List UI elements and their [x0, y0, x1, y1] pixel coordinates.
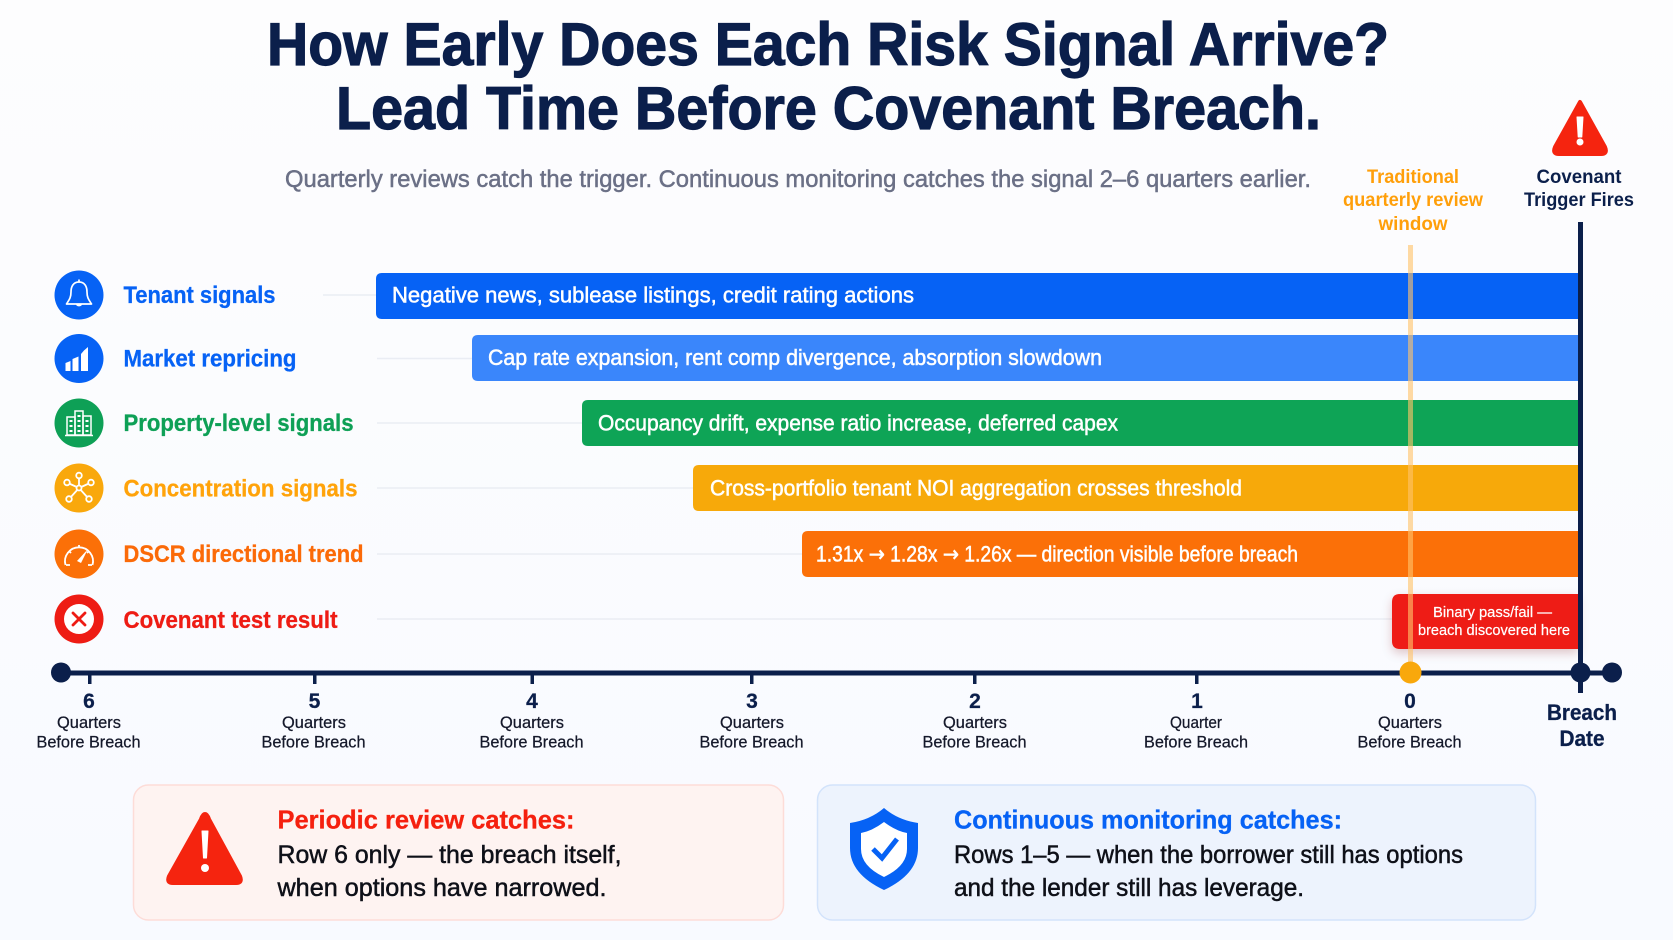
panel: continuous monitoring: Rows 1–5 — when the borrower still has options	[954, 841, 1463, 869]
axis labels: 4	[526, 690, 538, 713]
label: traditional review window: Traditional	[1367, 167, 1459, 188]
axis labels: 0	[1404, 690, 1416, 713]
axis labels: Quarters	[720, 714, 784, 732]
row 5: DSCR directional trend: DSCR directional trend	[124, 541, 364, 568]
row 4: concentration signals: Concentration signals	[124, 476, 358, 502]
icon: bar chart	[54, 334, 104, 383]
row 4: concentration signals	[54, 464, 1578, 512]
label: covenant trigger fires	[1524, 167, 1634, 211]
axis labels: Quarters	[500, 714, 564, 732]
panel: continuous monitoring	[818, 785, 1536, 920]
row 1: tenant signals: Negative news, sublease listings, credit rating actions	[392, 282, 914, 308]
axis labels: Before Breach	[1144, 734, 1248, 752]
row 3: property-level signals	[54, 398, 1578, 448]
timeline axis	[51, 222, 1622, 693]
axis labels: 5	[309, 690, 321, 713]
axis labels: Before Breach	[922, 734, 1026, 752]
axis labels: Quarter	[1170, 714, 1222, 732]
label: breach date: Breach	[1547, 700, 1617, 725]
axis labels: Before Breach	[262, 734, 366, 752]
title: How Early Does Each Risk Signal Arrive?	[267, 11, 1389, 78]
axis labels: 1	[1191, 690, 1203, 713]
title: Lead Time Before Covenant Breach.	[336, 75, 1321, 142]
icon: buildings	[54, 398, 104, 448]
label: breach date	[1547, 700, 1617, 751]
panel: periodic review: when options have narrowed.	[276, 874, 606, 902]
axis labels	[36, 690, 1462, 752]
panel: periodic review	[134, 785, 784, 920]
panel: continuous monitoring: and the lender still has leverage.	[954, 874, 1304, 902]
axis labels: Before Breach	[700, 734, 804, 752]
axis labels: 6	[83, 690, 95, 713]
axis labels: Quarters	[943, 714, 1007, 732]
row 3: property-level signals: Occupancy drift, expense ratio increase, deferred capex	[598, 410, 1118, 436]
row 6: covenant test result: breach discovered here	[1418, 622, 1570, 639]
icon: bell	[54, 270, 104, 320]
label: breach date: Date	[1560, 726, 1604, 751]
row 4: concentration signals: Cross-portfolio tenant NOI aggregation crosses threshold	[710, 476, 1242, 500]
icon: covenant warning triangle	[1554, 102, 1606, 154]
icon: network	[54, 464, 104, 512]
row 2: market repricing: Cap rate expansion, rent comp divergence, absorption slowdown	[488, 345, 1102, 370]
axis labels: Quarters	[57, 714, 121, 732]
row 6: covenant test result	[54, 594, 1578, 649]
label: traditional review window	[1343, 167, 1483, 235]
panel: periodic review: Row 6 only — the breach itself,	[278, 841, 622, 869]
row 2: market repricing: Market repricing	[124, 346, 296, 372]
axis labels: Before Breach	[1358, 734, 1462, 752]
label: traditional review window: window	[1378, 214, 1448, 235]
row 1: tenant signals	[54, 270, 1578, 320]
icon: shield	[850, 808, 918, 890]
panel: periodic review: Periodic review catches:	[278, 804, 574, 834]
connector lines	[323, 295, 1392, 619]
label: covenant trigger fires: Trigger Fires	[1524, 190, 1634, 211]
icon: red x	[54, 594, 104, 644]
axis labels: Quarters	[1378, 714, 1442, 732]
label: traditional review window: quarterly review	[1343, 190, 1483, 211]
row 5: DSCR directional trend: 1.31x → 1.28x → 1.26x — direction visible before breach	[816, 542, 1298, 568]
axis labels: 2	[969, 690, 981, 713]
axis labels: 3	[746, 690, 758, 713]
subtitle: Quarterly reviews catch the trigger. Continuous monitoring catches the signal 2–6 quarters earlier.	[285, 166, 1311, 193]
panel: continuous monitoring: Continuous monitoring catches:	[954, 804, 1342, 834]
row 6: covenant test result: Binary pass/fail —	[1433, 604, 1552, 621]
icon: warning triangle	[167, 813, 242, 884]
title	[267, 11, 1389, 142]
row 1: tenant signals: Tenant signals	[124, 282, 276, 309]
row 5: DSCR directional trend	[54, 530, 1578, 578]
row 2: market repricing	[54, 334, 1578, 383]
axis labels: Before Breach	[480, 734, 584, 752]
row 6: covenant test result: Covenant test result	[124, 607, 338, 634]
traditional review window line	[1408, 245, 1413, 673]
axis labels: Quarters	[282, 714, 346, 732]
axis labels: Before Breach	[36, 734, 140, 752]
label: covenant trigger fires: Covenant	[1536, 167, 1622, 188]
icon: gauge	[54, 530, 104, 578]
row 3: property-level signals: Property-level signals	[124, 410, 354, 437]
